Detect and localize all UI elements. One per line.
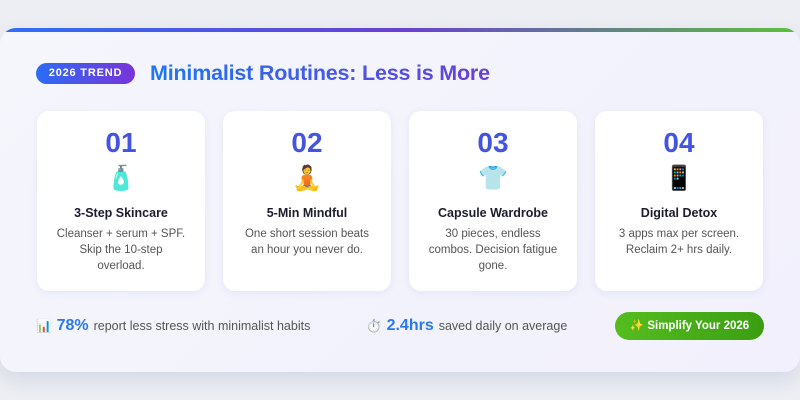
stat: stress: 78%: [57, 317, 89, 334]
card 03: 03: [477, 127, 509, 158]
button: [615, 312, 764, 340]
stat: time saved: [366, 317, 567, 334]
title: Minimalist Routines: Less is More: [150, 61, 490, 85]
stat: time saved: 2.4hrs: [387, 317, 434, 334]
card 04: 📱: [664, 165, 694, 192]
card 04: 04: [663, 127, 695, 158]
stat: time saved: ⏱️: [366, 318, 382, 332]
card 02: 02: [291, 127, 323, 158]
card 01: 01: [105, 127, 137, 158]
card 02: 5-Min Mindful: [267, 206, 347, 220]
card 02: 🧘: [292, 165, 322, 192]
card 01: 3-Step Skincare: [74, 206, 168, 220]
card 01: Cleanser + serum + SPF. Skip the 10-step overload.: [57, 228, 185, 272]
stat: time saved: saved daily on average: [439, 319, 567, 333]
stat: stress: 📊: [36, 318, 52, 332]
card 04: [595, 111, 763, 291]
stat: stress: [36, 317, 310, 334]
badge: 2026 trend: 2026 TREND: [49, 67, 122, 79]
button: ✨ Simplify Your 2026: [630, 320, 749, 332]
card 03: 👕: [478, 165, 508, 192]
card 02: One short session beats an hour you never do.: [245, 228, 369, 256]
badge: 2026 trend: [36, 63, 135, 84]
card 04: Digital Detox: [641, 206, 717, 220]
card 01: 🧴: [106, 165, 136, 192]
stat: stress: report less stress with minimalist habits: [94, 319, 310, 333]
card 04: 3 apps max per screen. Reclaim 2+ hrs daily.: [619, 228, 739, 256]
card 01: [37, 111, 205, 291]
card 02: [223, 111, 391, 291]
card 03: Capsule Wardrobe: [438, 206, 548, 220]
card 03: [409, 111, 577, 291]
card 03: 30 pieces, endless combos. Decision fatigue gone.: [429, 228, 557, 272]
